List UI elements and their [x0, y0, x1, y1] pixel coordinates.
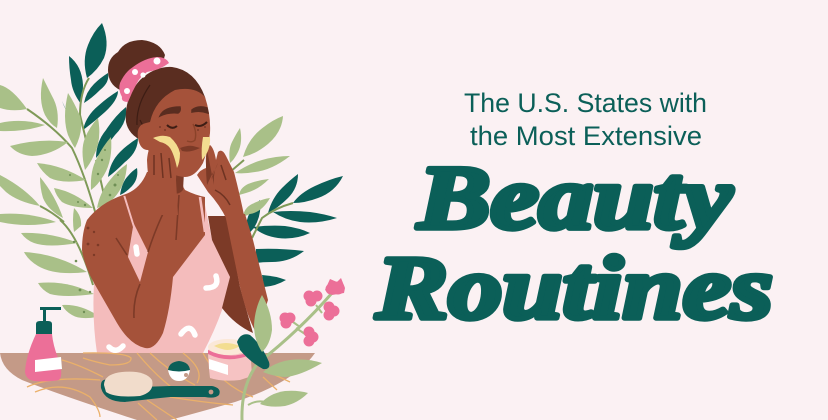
torso skin and neck [123, 172, 205, 277]
light green leaves [0, 78, 290, 318]
eyebrows [160, 107, 208, 116]
pump bottle [25, 307, 62, 381]
large cream jar [208, 339, 252, 381]
closed eyes [167, 122, 207, 128]
cotton pads [153, 136, 180, 168]
subtitle [464, 88, 707, 151]
dark teal leaves [62, 23, 343, 287]
plant stems [27, 78, 293, 285]
title: Routines [375, 239, 773, 338]
left arm [82, 190, 179, 348]
title [375, 149, 773, 338]
pink flowers [280, 278, 345, 346]
illustration: woman [82, 40, 268, 353]
face [138, 89, 210, 177]
scrunchie [119, 57, 169, 102]
hair [126, 67, 206, 140]
left hand [147, 145, 178, 215]
title: Beauty [417, 149, 733, 248]
flower stem and jar lid [237, 278, 345, 420]
dress pattern [109, 247, 217, 350]
table [0, 353, 315, 420]
hair strands [137, 85, 150, 130]
dress [93, 205, 230, 353]
wood grain [27, 353, 290, 420]
freckles [159, 126, 206, 131]
hairbrush [101, 372, 220, 402]
stem leaves [254, 295, 272, 352]
mouth and nose [180, 146, 200, 152]
right hand [197, 145, 245, 220]
hair bun [108, 40, 165, 90]
dress straps [124, 196, 205, 232]
jar lid [237, 334, 269, 369]
illustration: foliage behind woman [0, 23, 343, 318]
small jar [168, 361, 190, 381]
leaf speckles [69, 149, 119, 313]
right arm [208, 214, 268, 334]
subtitle: the Most Extensive [470, 121, 702, 151]
neck shadow [172, 172, 184, 194]
subtitle: The U.S. States with [464, 88, 707, 118]
